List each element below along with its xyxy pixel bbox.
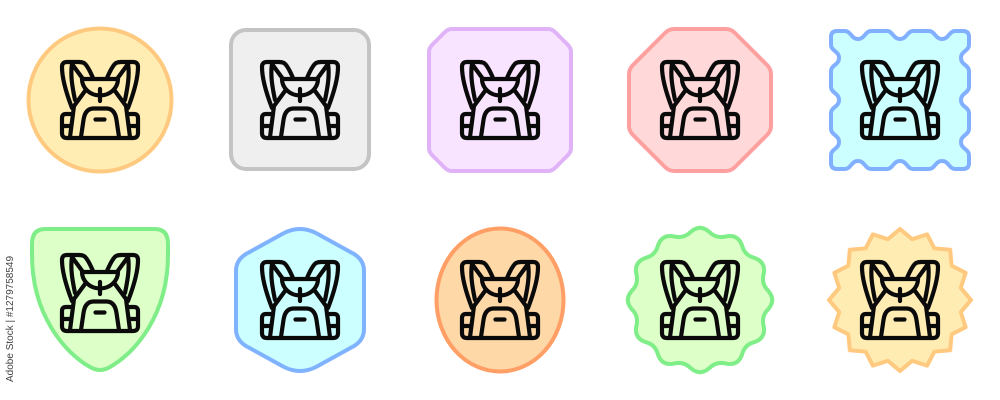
icon badge: gray rounded square backpack [231,30,369,169]
icon badge: yellow starburst backpack [829,229,971,371]
icon badge: lilac chamfered square backpack [429,29,571,171]
icon badge: red octagon backpack [629,29,771,171]
icon badge: blue postage stamp backpack [831,31,969,169]
stock image credit: Adobe Stock | #1279758549 [5,256,16,382]
icon badge: green wavy seal backpack [628,228,772,372]
icon badge: orange circle backpack [28,28,172,172]
icon badge: green shield backpack [32,229,168,370]
icon badge: orange oval backpack [436,228,564,372]
icon badge: blue hexagon backpack [236,229,364,371]
